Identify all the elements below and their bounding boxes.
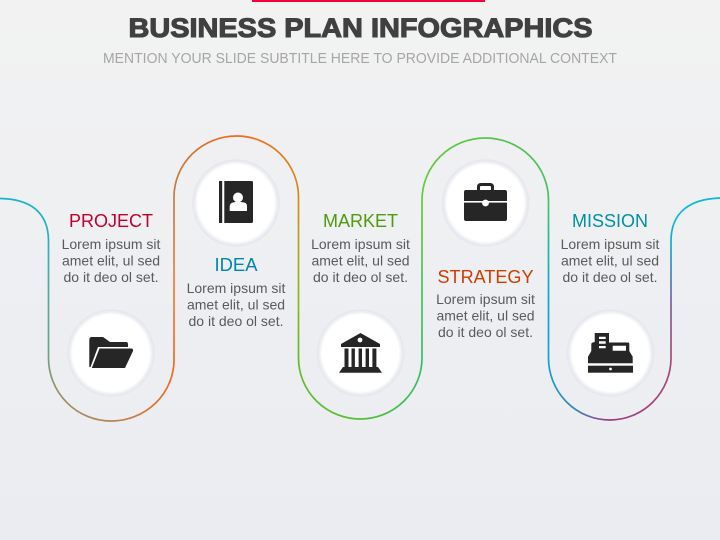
icon circle: mission [566,309,654,397]
heading: mission: MISSION [572,211,648,231]
subtitle: MENTION YOUR SLIDE SUBTITLE HERE TO PROVIDE ADDITIONAL CONTEXT [103,51,617,67]
panel: project [62,211,161,397]
panel: idea [187,159,286,329]
text block: strategy: amet elit, ul sed [436,308,535,324]
text block: market: amet elit, ul sed [311,252,410,268]
text block: market: Lorem ipsum sit [311,236,410,252]
text block: idea: Lorem ipsum sit [187,280,286,296]
text block: strategy: Lorem ipsum sit [436,291,535,307]
heading: market: MARKET [323,211,398,231]
text block: project: amet elit, ul sed [62,252,160,268]
icon circle: idea [192,159,280,247]
icon circle: strategy [442,159,530,247]
icon: briefcase [464,183,507,221]
text block: mission: Lorem ipsum sit [561,236,660,252]
icon: contact book [219,181,253,223]
heading: strategy: STRATEGY [438,267,534,287]
text block: mission: do it deo ol set. [563,269,657,285]
text block: mission: amet elit, ul sed [561,252,659,268]
title: BUSINESS PLAN INFOGRAPHICS [128,13,592,43]
heading: project: PROJECT [69,211,153,231]
text block: idea: amet elit, ul sed [187,296,285,312]
icon circle: project [67,309,155,397]
top accent bar [252,0,485,2]
panel: market [311,211,410,397]
icon circle: market [316,309,404,397]
text block: idea: do it deo ol set. [189,313,283,329]
text block: market: do it deo ol set. [313,269,408,285]
text block: strategy: do it deo ol set. [438,324,533,340]
text block: project: do it deo ol set. [64,269,158,285]
icon: folder [89,337,133,368]
winding gradient line [0,136,720,421]
icon: bank [339,333,382,373]
panel: mission [561,211,660,397]
panel: strategy [436,159,535,340]
icon: cash register [588,333,633,373]
heading: idea: IDEA [214,255,258,275]
text block: project: Lorem ipsum sit [62,236,161,252]
